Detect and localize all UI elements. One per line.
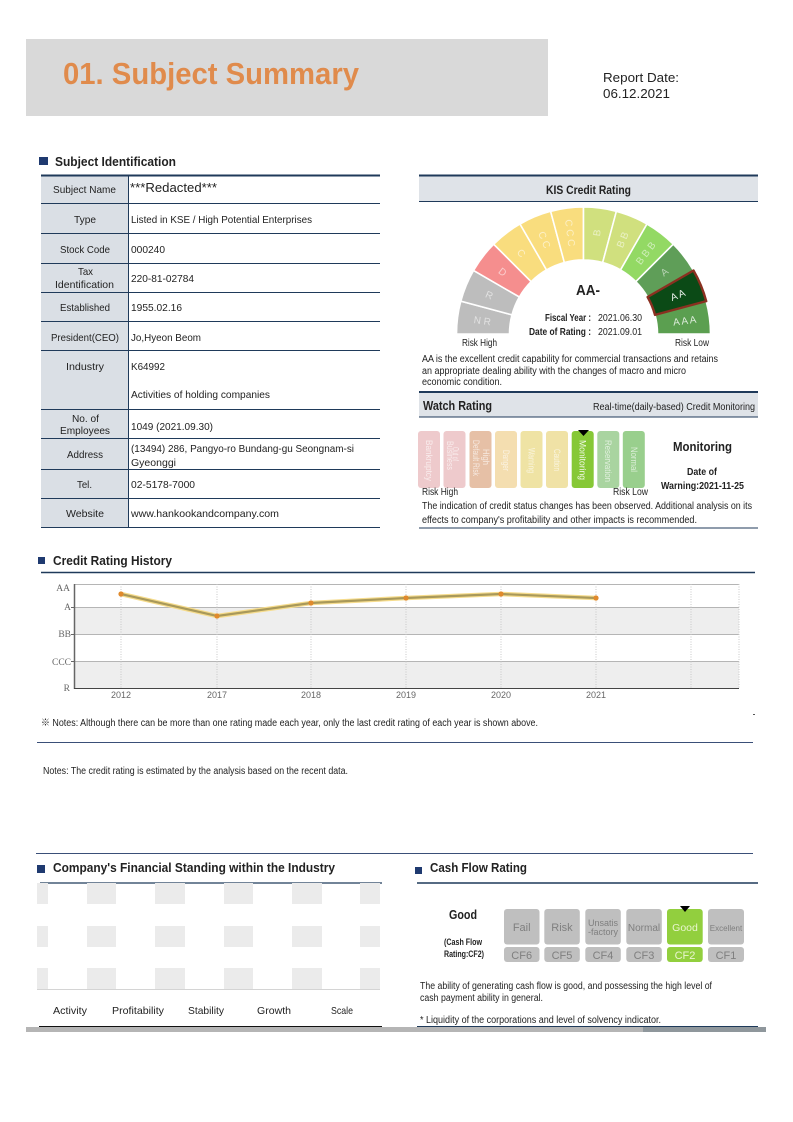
rating description [422,354,718,388]
y axis labels [52,584,71,694]
identification table: (13494) 286, Pangyo-ro Bundang-gu Seongnam-si [131,443,354,455]
heading: financial standing: Company's Financial Standing within the Industry [53,860,336,875]
y axis labels: A [64,603,71,613]
identification table: 000240 [131,244,165,256]
heading: cash flow rating: Cash Flow Rating [430,860,527,875]
cash flow scale: CF4 [593,950,613,962]
rating gauge: B B B [634,240,659,267]
identification table: Website [66,508,104,520]
rating gauge: C [514,247,527,260]
identification table: President(CEO) [51,332,119,344]
rating gauge: B [592,229,604,237]
category labels: Stability [188,1005,225,1017]
identification table: ***Redacted*** [130,180,217,195]
watch rating scale: Danger [500,450,511,471]
x axis labels: 2012 [111,690,131,700]
cash flow scale: Unsatis [588,918,619,928]
panel: watch rating [418,391,758,528]
watch rating scale: Bankruptcy [423,440,434,481]
identification table: 02-5178-7000 [131,479,195,491]
rating gauge [456,203,715,347]
identification table: Listed in KSE / High Potential Enterprises [131,214,312,226]
risk labels: Risk High [462,338,497,349]
risk labels: Risk High [422,487,458,498]
rating dates: 2021.09.01 [598,327,642,338]
cash flow scale: CF6 [511,950,532,962]
x axis labels: 2021 [586,690,606,700]
cash flow scale: Fail [513,922,531,934]
identification table: 220-81-02784 [131,273,194,285]
cash flow grade: (Cash Flow [444,937,483,947]
category labels: Growth [257,1005,291,1017]
report date [603,70,679,101]
identification table: www.hankookandcompany.com [130,508,279,520]
monitoring status [661,439,744,492]
cash flow description: cash payment ability in general. [420,993,543,1004]
icon: current position marker [680,906,690,912]
cash flow scale: CF3 [634,950,654,962]
identification table: Employees [60,425,110,437]
risk labels: Risk Low [613,487,649,498]
cash flow scale: CF2 [675,950,695,962]
watch rating scale: Warning [526,448,536,473]
heading: subject identification: Subject Identification [55,154,176,169]
cash flow scale: Good [672,922,698,934]
identification table: Industry [66,361,105,373]
rating gauge: C C [535,230,552,250]
cash flow description [417,981,758,1026]
watch rating scale: Default Risk [470,440,481,476]
cash flow description: * Liquidity of the corporations and level of solvency indicator. [420,1015,661,1026]
identification table: Gyeonggi [131,457,176,469]
rating gauge: R [483,289,494,302]
watch description: effects to company's profitability and other impacts is recommended. [422,515,697,526]
risk labels: Risk Low [675,338,710,349]
monitoring status: Date of [687,467,718,478]
identification table: Activities of holding companies [131,389,270,401]
heading bar: watch rating: Real-time(daily-based) Credit Monitoring [593,402,755,413]
category labels [39,1005,382,1026]
rating dates: Fiscal Year : [545,313,591,324]
panel: credit rating history [37,553,755,777]
x axis labels: 2017 [207,690,227,700]
cash flow scale: -factory [588,927,618,937]
heading bar: watch rating: Watch Rating [423,399,492,413]
identification table: Subject Name [53,184,116,196]
cash flow scale: Normal [628,923,660,934]
y axis labels: AA [56,584,70,594]
watch rating scale: Normal [628,447,639,472]
identification table: Established [60,302,110,314]
rating trend line [118,591,599,619]
monitoring status: Monitoring [673,439,732,454]
watch rating scale: Monitoring [576,440,588,480]
rating description: an appropriate dealing ability with the changes of macro and micro [422,366,686,377]
y axis labels: BB [58,630,71,640]
x axis labels: 2018 [301,690,321,700]
identification table: Type [74,214,96,226]
report date: Report Date: [603,70,679,85]
monitoring status: Warning:2021-11-25 [661,481,744,492]
x axis labels: 2019 [396,690,416,700]
x axis labels [111,690,606,700]
rating dates [529,313,642,338]
title: 01. Subject Summary [63,56,360,91]
identification table: Stock Code [60,244,110,256]
line chart [52,584,739,700]
rating gauge: A [659,266,671,279]
panel: cash flow rating [415,860,758,1026]
heading bar: KIS credit rating: KIS Credit Rating [546,185,631,197]
rating gauge: A A [669,288,687,304]
identification table: Tel. [77,479,92,491]
risk labels [422,487,649,498]
watch description: The indication of credit status changes has been observed. Additional analysis on its [422,501,752,512]
watch rating scale: Out of [450,447,460,461]
cash flow scale: Risk [551,922,573,934]
cash flow grade: Good [449,907,477,922]
heading: credit rating history [38,553,755,572]
estimation note: Notes: The credit rating is estimated by the analysis based on the recent data. [43,766,348,777]
cash flow grade: Rating:CF2) [444,949,484,959]
heading: cash flow rating [415,860,758,883]
category labels: Profitability [112,1005,165,1017]
cash flow scale: Excellent [710,924,743,933]
heading: financial standing [37,860,382,883]
heading bar: KIS credit rating [419,175,758,202]
rating description: AA is the excellent credit capability for commercial transactions and retains [422,354,718,365]
rating dates: 2021.06.30 [598,313,642,324]
identification table [41,175,380,528]
identification table: 1955.02.16 [131,302,182,314]
watch description [419,501,758,528]
identification table: 1049 (2021.09.30) [131,421,213,433]
watch rating scale: Reservation [602,440,613,482]
panel: subject identification [39,154,380,528]
chart note: ※ Notes: Although there can be more than one rating made each year, only the last credit rating of each year is shown above. [41,718,538,729]
watch rating scale: High [480,449,491,465]
watch rating scale: Caution [551,449,562,471]
y axis labels: R [64,684,71,694]
identification table: Identification [55,279,114,291]
header banner [26,39,548,116]
rating gauge: N R [473,315,492,328]
rating dates: Date of Rating : [529,327,591,338]
rating gauge: D [496,266,508,279]
watch rating scale [418,430,645,488]
rating description: economic condition. [422,377,502,388]
x axis labels: 2020 [491,690,511,700]
watch rating scale: Business [444,441,455,470]
heading: credit rating history: Credit Rating History [53,553,173,568]
current rating value: AA- [576,282,600,299]
identification table: Address [67,449,103,461]
cash flow scale: CF5 [552,950,572,962]
identification table: Jo,Hyeon Beom [131,332,201,344]
heading bar: watch rating [419,391,758,417]
cash flow scale: CF1 [716,950,736,962]
identification table: No. of [72,413,99,425]
identification table: K64992 [131,361,165,373]
icon: current position marker [578,430,589,436]
category labels: Activity [53,1005,88,1017]
cash flow grade [444,907,484,959]
category labels: Scale [331,1005,353,1017]
rating gauge: B B [615,230,632,250]
cash flow description: The ability of generating cash flow is good, and possessing the high level of [420,981,712,992]
report date: 06.12.2021 [603,86,670,101]
panel: financial standing within the industry [37,860,382,1026]
identification table: Tax [78,266,94,278]
panel: KIS credit rating [419,175,758,388]
risk labels [462,338,710,349]
rating gauge: A A A [672,315,697,329]
rating gauge: C C C [562,219,576,247]
footer strip [26,1027,766,1032]
y axis labels: CCC [52,658,71,668]
standing chart grid [37,883,380,990]
cash flow scale [504,906,744,962]
